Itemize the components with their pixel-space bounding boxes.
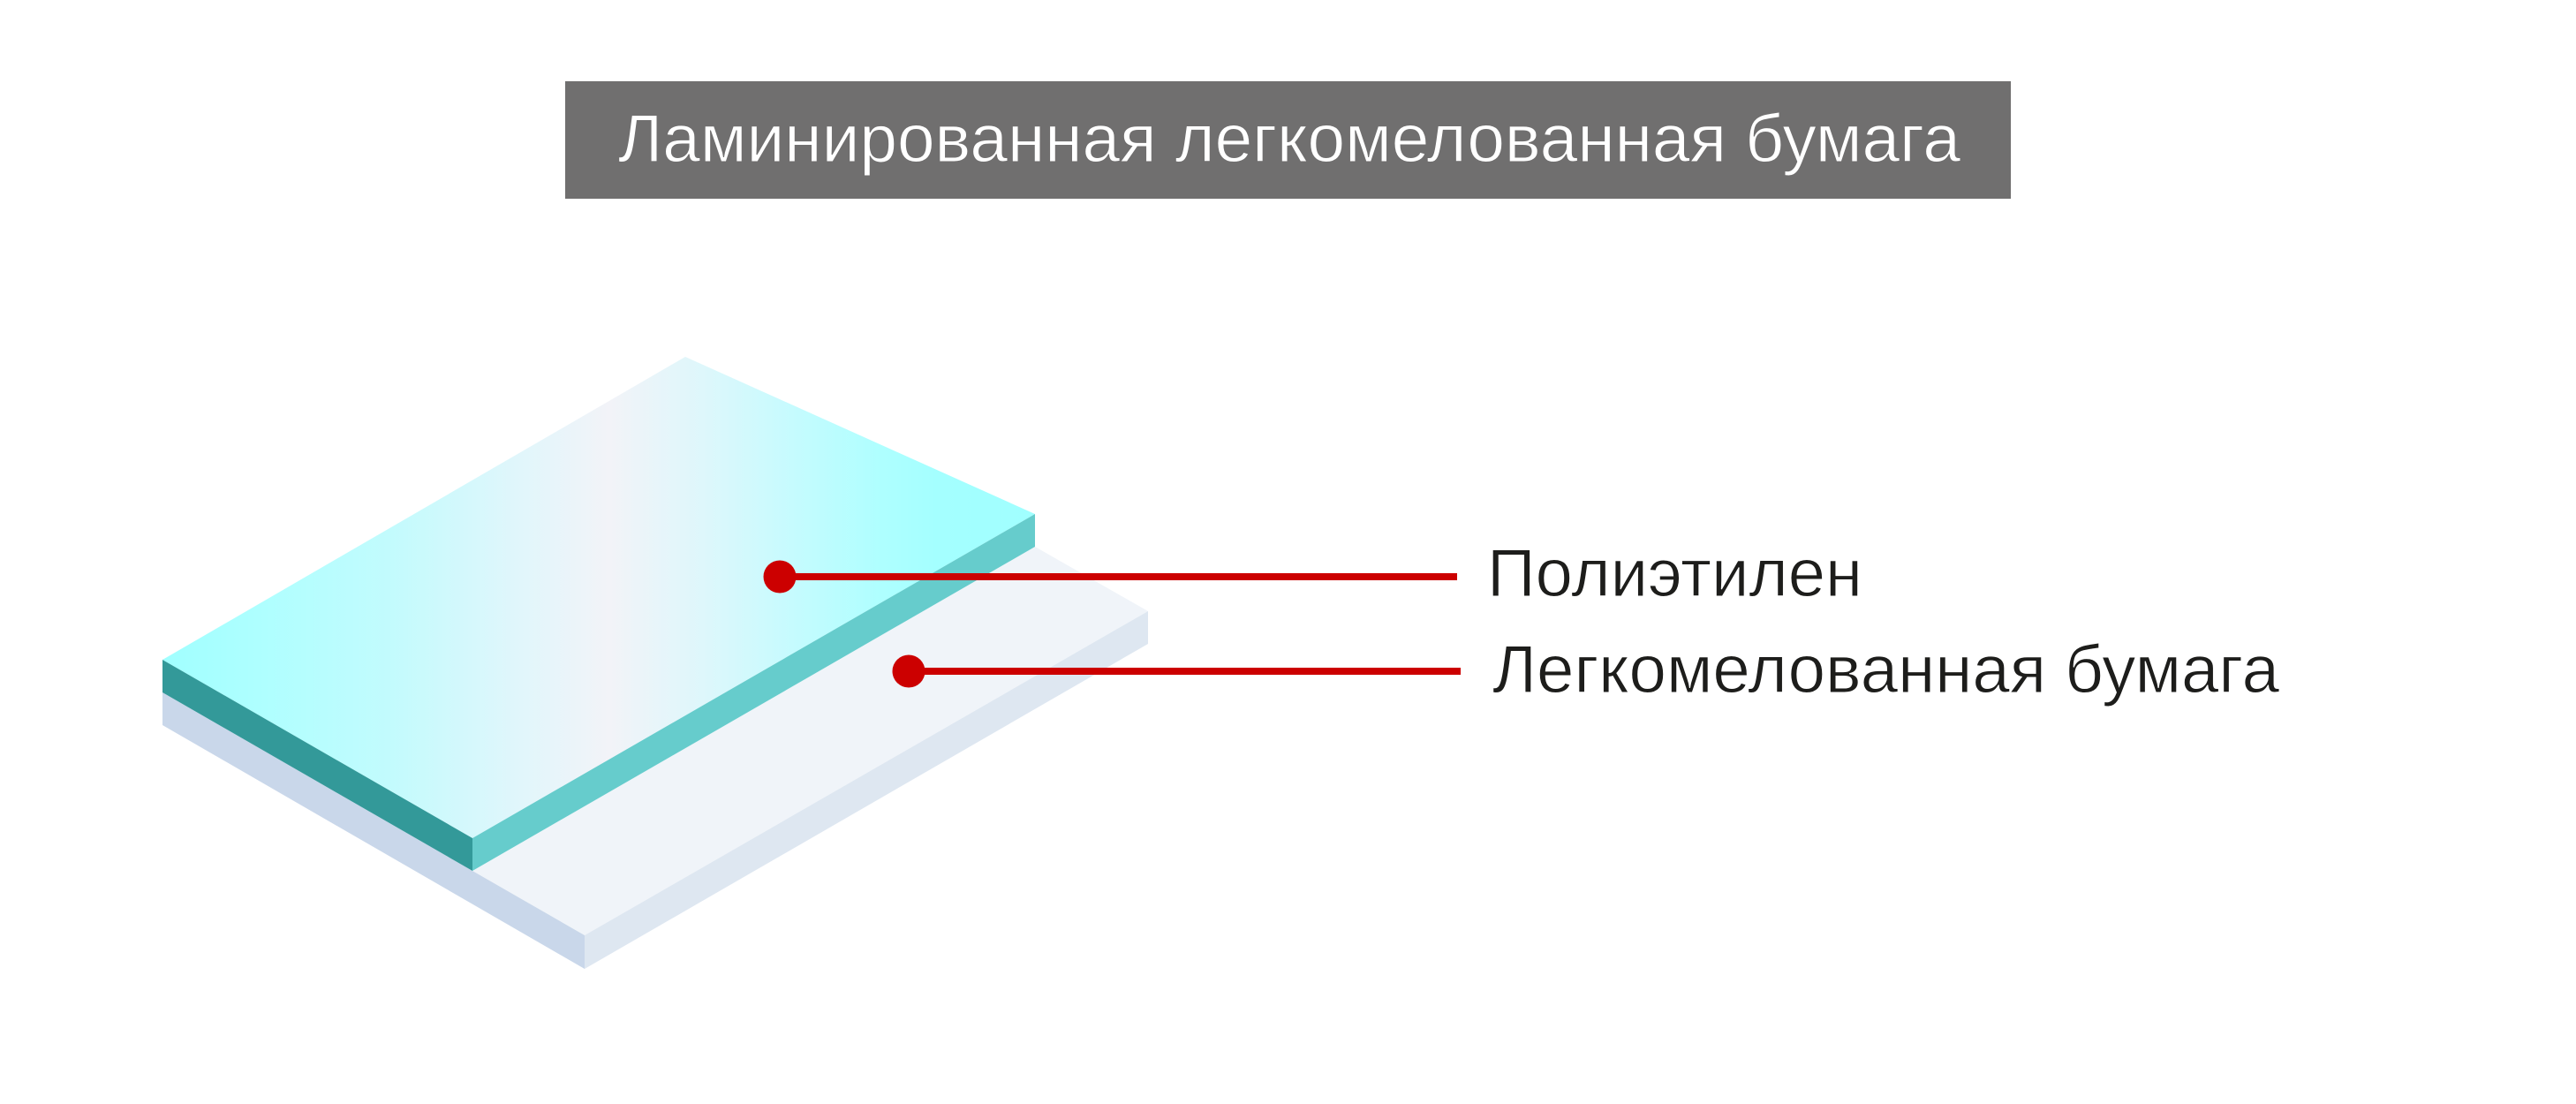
- label: paper: Легкомелованная бумага: [1492, 632, 2280, 707]
- callout: polyethylene: [763, 536, 1862, 611]
- title banner: [565, 81, 2011, 199]
- layer: paper: [162, 547, 1148, 969]
- callout: paper: [892, 632, 2280, 707]
- label: polyethylene: Полиэтилен: [1487, 536, 1862, 611]
- layered material illustration: [162, 357, 1148, 969]
- layer: polyethylene: [162, 357, 1035, 871]
- title text: Ламинированная легкомелованная бумага: [618, 102, 1961, 177]
